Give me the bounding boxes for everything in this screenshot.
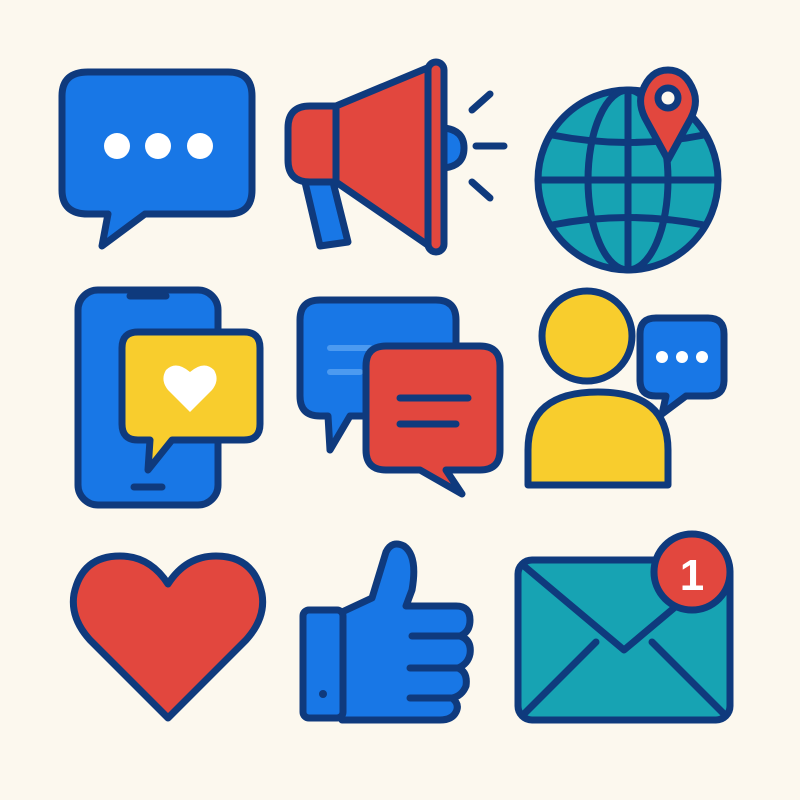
- icon: person with chat: [528, 291, 724, 485]
- icon: thumbs up: [303, 544, 470, 720]
- icon: chat bubble with dots: [62, 72, 252, 246]
- icon: envelope with notification: 1: [680, 551, 704, 600]
- icon: two speech bubbles: [300, 300, 500, 494]
- icon: envelope with notification: [518, 534, 730, 720]
- icon: globe with pin: [538, 70, 718, 270]
- icon: heart: [73, 556, 263, 718]
- icon: phone with heart message: [78, 290, 260, 505]
- icon: megaphone: [288, 62, 504, 252]
